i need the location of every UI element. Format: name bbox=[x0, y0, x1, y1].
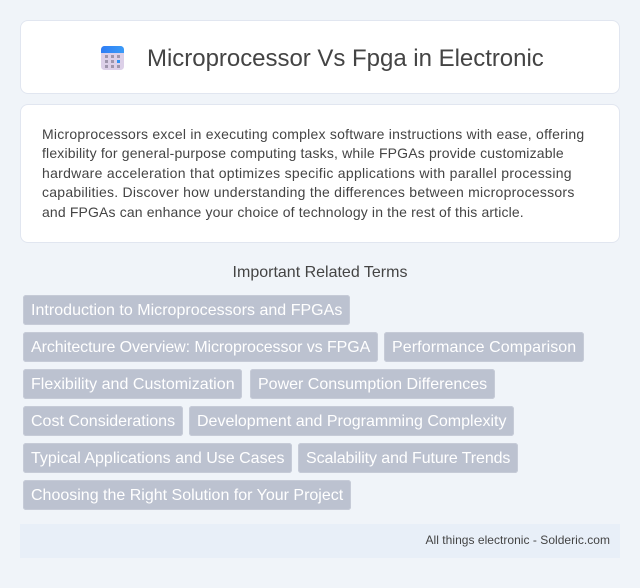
related terms tags: Development and Programming Complexity bbox=[197, 413, 506, 430]
related terms tags bbox=[23, 295, 584, 510]
intro paragraph: Microprocessors excel in executing complex software instructions with ease, offering bbox=[42, 126, 584, 142]
icon: processor chip calendar bbox=[101, 46, 124, 70]
intro paragraph: flexibility for general-purpose computing tasks, while FPGAs provide customizable bbox=[42, 145, 564, 161]
related terms tags: Typical Applications and Use Cases bbox=[31, 450, 284, 467]
intro paragraph: hardware acceleration that optimizes specific applications with parallel processing bbox=[42, 165, 572, 181]
related terms tags: Power Consumption Differences bbox=[258, 376, 487, 393]
footer credit: All things electronic - Solderic.com bbox=[426, 533, 610, 547]
related terms tags: Cost Considerations bbox=[31, 413, 175, 430]
panel: introduction text bbox=[20, 104, 620, 243]
intro paragraph bbox=[42, 126, 584, 220]
intro paragraph: and FPGAs can enhance your choice of technology in the rest of this article. bbox=[42, 204, 524, 220]
panel: title card bbox=[20, 20, 620, 94]
related terms tags: Scalability and Future Trends bbox=[306, 450, 510, 467]
related terms tags: Architecture Overview: Microprocessor vs FPGA bbox=[31, 339, 370, 356]
related terms tags: Choosing the Right Solution for Your Project bbox=[31, 487, 343, 504]
title: Microprocessor Vs Fpga in Electronic bbox=[147, 45, 544, 72]
related terms tags: Introduction to Microprocessors and FPGAs bbox=[31, 302, 342, 319]
heading: important related terms: Important Related Terms bbox=[233, 264, 407, 281]
related terms tags: Performance Comparison bbox=[392, 339, 576, 356]
intro paragraph: capabilities. Discover how understanding the differences between microprocessors bbox=[42, 184, 575, 200]
related terms tags: Flexibility and Customization bbox=[31, 376, 235, 393]
footer bar bbox=[20, 524, 620, 558]
